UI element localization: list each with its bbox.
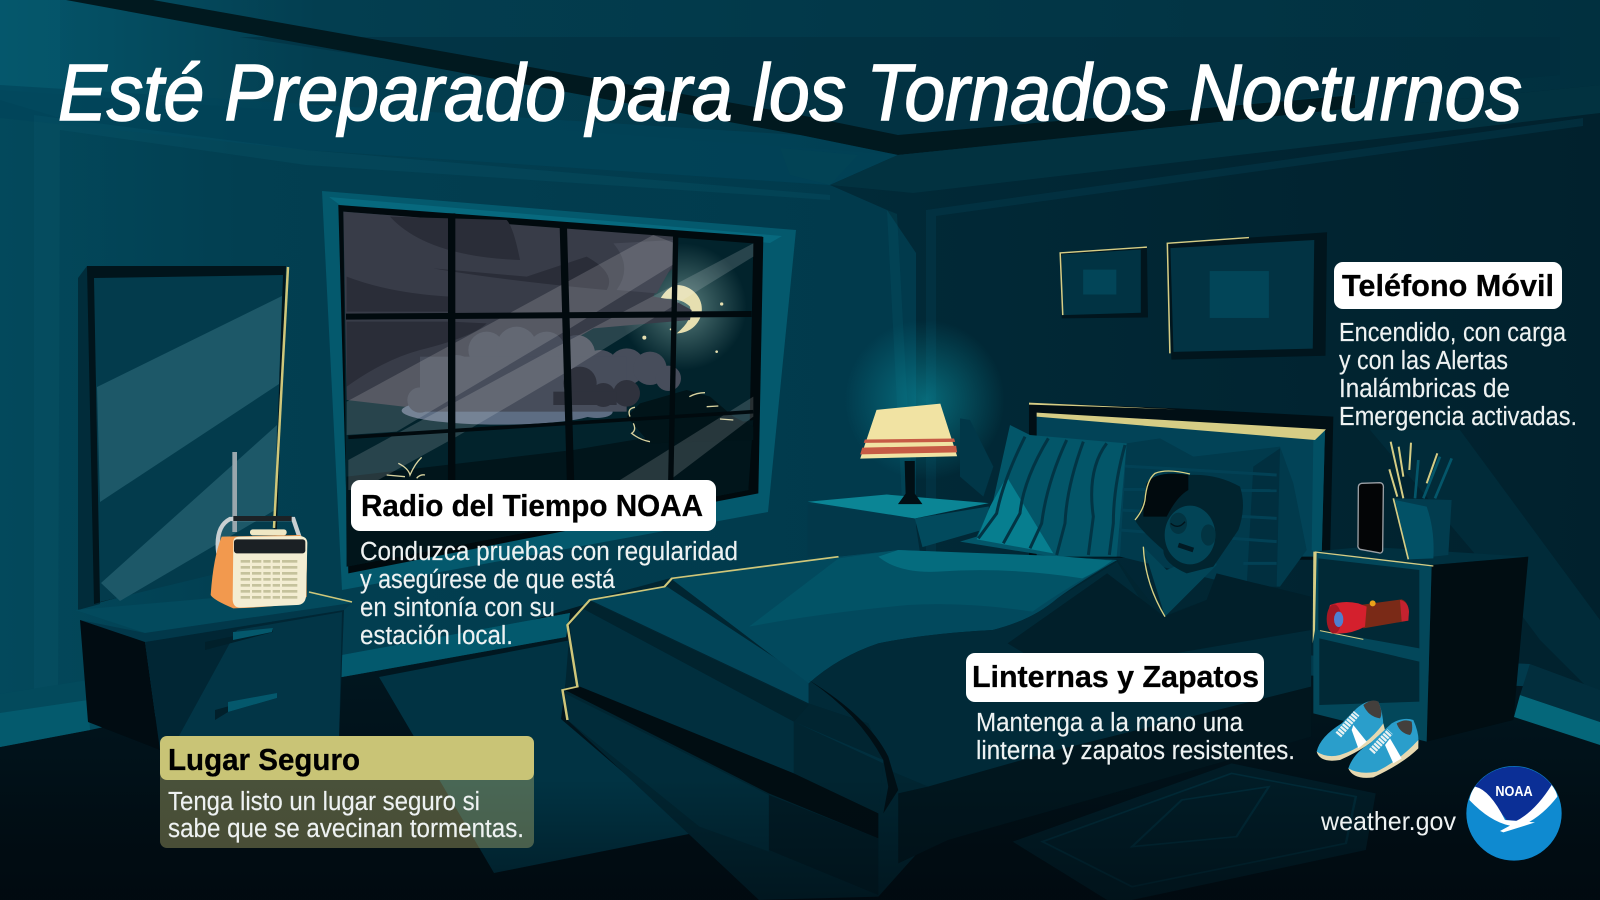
callout: safe place: sabe que se avecinan tormentas.: [168, 815, 524, 843]
pillows: [960, 425, 1307, 587]
framed picture: large: [1167, 232, 1327, 360]
callout: mobile phone: [1334, 262, 1577, 431]
callout: mobile phone: y con las Alertas: [1339, 347, 1508, 375]
light beams: [347, 235, 753, 490]
icon: NOAA logo: [1466, 766, 1562, 861]
lamp nightstand: [808, 495, 989, 557]
window: [322, 191, 796, 590]
rug: [1013, 763, 1376, 900]
window muntins: [346, 213, 753, 487]
left nightstand: [75, 590, 352, 750]
icon: shoes: [1317, 701, 1418, 778]
mirror: [78, 266, 288, 610]
callout: flashlights and shoes: Linternas y Zapatos: [972, 659, 1259, 694]
callout: NOAA radio: en sintonía con su: [360, 594, 555, 622]
framed picture: small: [1060, 247, 1148, 318]
callout: mobile phone: Teléfono Móvil: [1342, 268, 1554, 303]
callout: mobile phone: Emergencia activadas.: [1339, 403, 1577, 431]
icon: flashlight: [1327, 599, 1409, 634]
callout: NOAA radio: Conduzca pruebas con regularidad: [360, 538, 738, 566]
moon: [660, 285, 702, 333]
callout: flashlights and shoes: [966, 653, 1295, 765]
pencil cup: [1389, 442, 1452, 559]
callout: flashlights and shoes: linterna y zapatos resistentes.: [976, 737, 1295, 765]
stars: [642, 302, 723, 353]
website: weather.gov: [1320, 806, 1456, 836]
callout: NOAA radio: [351, 480, 738, 650]
icon: phone: [1358, 483, 1383, 553]
sleeping person: [1135, 471, 1243, 617]
icon: NOAA logo: NOAA: [1495, 784, 1533, 800]
storm clouds: [343, 212, 692, 425]
tree silhouette: [387, 390, 753, 478]
floor: [0, 600, 1600, 900]
callout: flashlights and shoes: Mantenga a la mano una: [976, 709, 1244, 737]
callout: safe place: Tenga listo un lugar seguro si: [168, 788, 480, 816]
icon: radio: [211, 452, 307, 608]
callout: NOAA radio: y asegúrese de que está: [360, 566, 616, 594]
callout: mobile phone: Encendido, con carga: [1339, 319, 1567, 347]
callout: safe place: [160, 736, 534, 848]
bed: [562, 550, 1311, 900]
lamp: [860, 404, 957, 504]
callout: NOAA radio: Radio del Tiempo NOAA: [361, 488, 703, 523]
bottom shade: [0, 780, 1600, 900]
headboard: [960, 403, 1333, 560]
bedside table: [1313, 547, 1528, 742]
callout: mobile phone: Inalámbricas de: [1339, 375, 1510, 403]
callout: NOAA radio: estación local.: [360, 622, 513, 650]
callout: safe place: Lugar Seguro: [168, 742, 360, 777]
